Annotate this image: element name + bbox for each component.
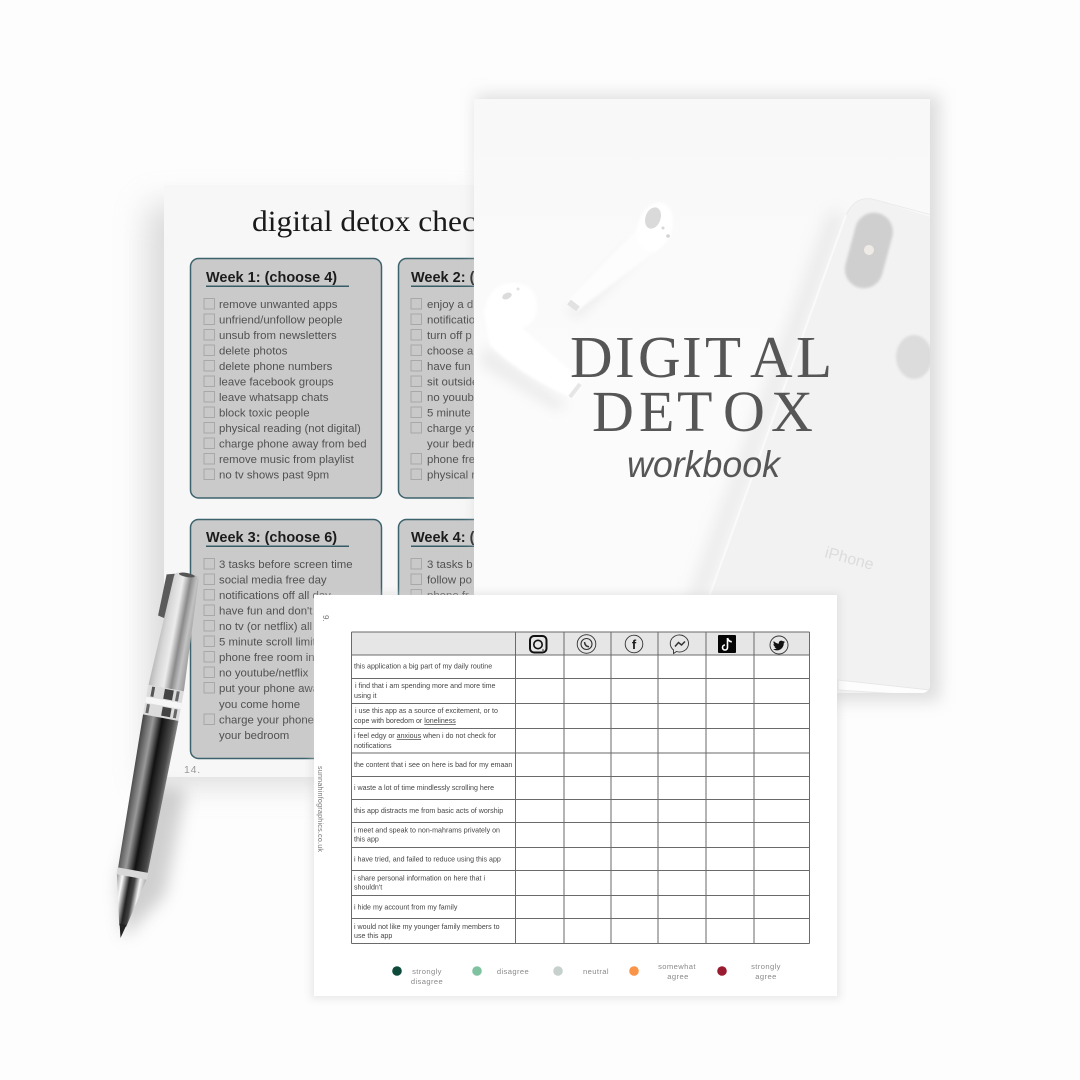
panel: week 1: charge phone away from bed (219, 438, 367, 450)
pen barrel silver (148, 571, 205, 691)
panel: week 2: notificatio (427, 314, 475, 326)
panel: week 4: phone fr (427, 590, 469, 602)
legend: disagree (411, 977, 443, 986)
table row labels: i hide my account from my family (354, 904, 458, 912)
panel: week 3: no youtube/netflix (219, 668, 309, 680)
iphone label: iPhone (823, 544, 876, 574)
panel: week 2: turn off p (427, 330, 472, 342)
icon: pen (100, 569, 205, 941)
panel: week 4: Week 4: ( (411, 530, 475, 546)
airpod shadows (483, 300, 594, 406)
panel: week 2: choose a (427, 346, 474, 358)
table row labels: this app (354, 836, 379, 844)
icon: whatsapp (577, 635, 596, 653)
icon: instagram (530, 636, 546, 652)
pen rings (143, 685, 184, 721)
icon: facebook (625, 635, 643, 653)
panel: week 2: Week 2: ( (411, 270, 475, 286)
panel: week 1: delete photos (219, 346, 288, 358)
table row labels: cope with boredom or loneliness (354, 717, 456, 725)
icon: phone (723, 198, 930, 693)
table row labels: the content that i see on here is bad for my emaan (354, 761, 512, 769)
table row labels: i have tried, and failed to reduce using this app (354, 856, 501, 864)
panel: week 1: unfriend/unfollow people (219, 314, 342, 326)
panel: week 3: have fun and don't (219, 606, 313, 618)
page number 9: 9. (321, 615, 330, 622)
panel: week 1: physical reading (not digital) (219, 423, 361, 435)
table row labels: shouldn't (354, 884, 382, 892)
panel: week 3: phone free room in (219, 652, 315, 664)
panel: week 1: remove unwanted apps (219, 299, 338, 311)
legend (392, 962, 781, 986)
pen clip shadow side (158, 572, 175, 619)
table row labels: using it (354, 692, 377, 700)
cover subtitle workbook: workbook (627, 444, 782, 485)
panel: week 1: no tv shows past 9pm (219, 470, 329, 482)
panel: week 3: put your phone away (219, 683, 325, 695)
page number 14: 14. (184, 764, 201, 776)
panel: week 3: you come home (219, 699, 300, 711)
table row labels: use this app (354, 932, 392, 940)
panel: week 4 (398, 520, 590, 758)
checklist title: digital detox chec (252, 205, 476, 238)
panel: cover shadow (476, 95, 940, 701)
panel: week 1: delete phone numbers (219, 361, 333, 373)
panel: week 1: unsub from newsletters (219, 330, 337, 342)
panel: checklist page (164, 185, 590, 777)
table row labels: i meet and speak to non-mahrams privately on (354, 826, 500, 834)
panel: week 2: no youub (427, 392, 474, 404)
phone camera (844, 212, 894, 289)
panel: week 1: remove music from playlist (219, 454, 355, 466)
phone lower edge (840, 680, 928, 693)
panel: week 4: 3 tasks b (427, 559, 473, 571)
table row labels: notifications (354, 742, 392, 750)
table row labels: i use this app as a source of excitement, or to (355, 707, 498, 715)
airpod bottom (502, 288, 582, 398)
panel: week 2 (398, 258, 590, 498)
pen cap top (179, 572, 195, 578)
panel: week 2: enjoy a d (427, 299, 473, 311)
icon: apple logo (896, 335, 932, 379)
panel: week 2: physical r (427, 470, 475, 482)
airpod top (567, 208, 670, 311)
panel: week 1: leave whatsapp chats (219, 392, 329, 404)
legend: strongly (412, 967, 442, 976)
legend: strongly (751, 962, 781, 971)
table row labels: i would not like my younger family members to (354, 923, 500, 931)
table (352, 632, 810, 944)
panel: week 2: phone fre (427, 454, 475, 466)
table row labels: this application a big part of my daily routine (354, 662, 492, 670)
cover title digital: DIGITAL (570, 324, 832, 390)
panel: week 3: social media free day (219, 574, 327, 586)
table row labels: this app distracts me from basic acts of worship (354, 807, 503, 815)
panel: week 3 (190, 520, 382, 758)
legend: agree (755, 972, 777, 981)
legend: somewhat (658, 962, 696, 971)
legend: disagree (497, 967, 529, 976)
panel: week 3: charge your phone (219, 714, 314, 726)
panel: week 2: your bedr (427, 438, 475, 450)
table row labels: i find that i am spending more and more time (355, 682, 496, 690)
panel: checklist page shadow (148, 205, 478, 783)
panel: week 3: your bedroom (219, 730, 289, 742)
panel: week 2: sit outside (427, 376, 478, 388)
panel: workbook cover (474, 99, 960, 700)
panel: week 3: 5 minute scroll limit (219, 636, 317, 648)
icon: tiktok (718, 635, 736, 653)
icon: messenger (670, 635, 689, 654)
panel: week 2: have fun (427, 361, 471, 373)
panel: week 2: charge yo (427, 423, 477, 435)
panel: week 1 (190, 258, 382, 498)
table row labels: i waste a lot of time mindlessly scrolling here (354, 784, 494, 792)
panel: table page shadow (311, 593, 840, 999)
icon: twitter (770, 636, 788, 654)
panel: week 1: block toxic people (219, 408, 310, 420)
table row labels: i share personal information on here that i (354, 874, 485, 882)
panel: week 3: Week 3: (choose 6) (206, 530, 337, 546)
panel: week 2: 5 minute (427, 408, 471, 420)
panel: week 3: notifications off all day (219, 590, 331, 602)
table row labels: i feel edgy or anxious when i do not check for (354, 732, 497, 740)
panel: week 3: 3 tasks before screen time (219, 559, 353, 571)
panel: week 1: Week 1: (choose 4) (206, 270, 337, 286)
table row labels (354, 662, 512, 940)
panel: week 3: no tv (or netflix) all (219, 621, 312, 633)
icon: airpods (483, 208, 670, 406)
icon: facebook: f (632, 637, 637, 652)
panel: table page (314, 595, 837, 996)
site credit: sunnahinfographics.co.uk (316, 766, 325, 852)
panel: week 4: follow po (427, 574, 472, 586)
legend: agree (667, 972, 689, 981)
pen nose cone (105, 867, 148, 941)
cover title detox: DETOX (592, 379, 813, 444)
pen barrel black (115, 714, 178, 874)
phone shadow (688, 210, 845, 600)
panel: week 1: leave facebook groups (219, 376, 334, 388)
legend: neutral (583, 967, 609, 976)
icon: pen shadow (118, 785, 186, 938)
